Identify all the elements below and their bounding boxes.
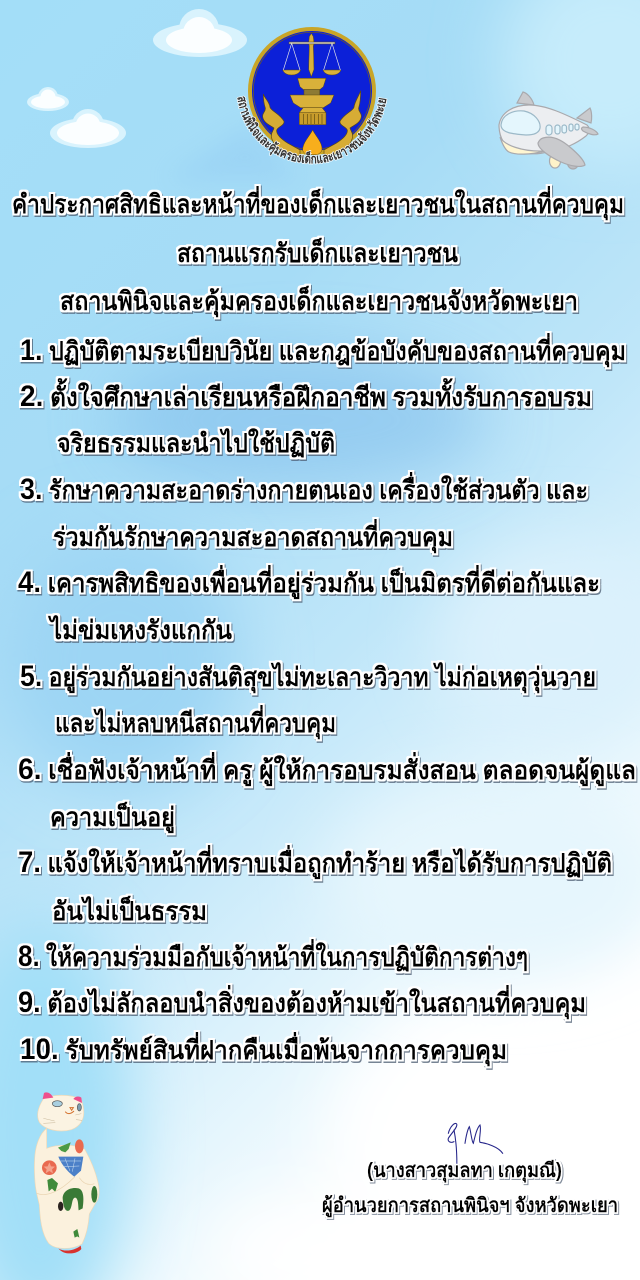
duty 6 xyxy=(18,751,636,834)
duty 3: 3. รักษาความสะอาดร่างกายตนเอง เครื่องใช้ส่วนตัว และ xyxy=(20,471,588,506)
duty 10: 10. รับทรัพย์สินที่ฝากคืนเมื่อพ้นจากการควบคุม xyxy=(20,1031,507,1067)
duty 7: อันไม่เป็นธรรม xyxy=(52,895,207,926)
text block: numbered duties xyxy=(18,332,636,1067)
duty 2: 2. ตั้งใจศึกษาเล่าเรียนหรือฝึกอาชีพ รวมทั้งรับการอบรม xyxy=(20,377,592,413)
duty 5 xyxy=(20,660,596,740)
signatory title: ผู้อำนวยการสถานพินิจฯ จังหวัดพะเยา xyxy=(322,1194,618,1219)
cloud: left xyxy=(50,109,126,148)
duty 7 xyxy=(18,844,612,926)
signature xyxy=(448,1123,503,1175)
duty 3 xyxy=(20,471,588,554)
icon: organisation emblem xyxy=(236,27,388,164)
duty 8: 8. ให้ความร่วมมือกับเจ้าหน้าที่ในการปฏิบัติการต่างๆ xyxy=(18,938,528,973)
duty 9: 9. ต้องไม่ลักลอบนำสิ่งของต้องห้ามเข้าในสถานที่ควบคุม xyxy=(18,984,586,1020)
duty 5: และไม่หลบหนีสถานที่ควบคุม xyxy=(55,704,336,740)
cloud: small left xyxy=(27,87,69,111)
icon: airplane xyxy=(499,92,598,169)
duty 4: 4. เคารพสิทธิของเพื่อนที่อยู่ร่วมกัน เป็นมิตรที่ดีต่อกันและ xyxy=(18,564,600,600)
duty 4 xyxy=(18,564,600,645)
title: สถานพินิจและคุ้มครองเด็กและเยาวชนจังหวัดพะเยา xyxy=(60,285,578,318)
duty 6: ความเป็นอยู่ xyxy=(50,801,175,834)
icon: lucky cat figure xyxy=(34,1092,99,1253)
duty 2: จริยธรรมและนำไปใช้ปฏิบัติ xyxy=(57,427,335,458)
signatory name: (นางสาวสุมลทา เกตุมณี) xyxy=(367,1159,562,1183)
naga right xyxy=(324,91,361,156)
scales of justice xyxy=(283,33,341,155)
duty 3: ร่วมกันรักษาความสะอาดสถานที่ควบคุม xyxy=(53,518,453,554)
duty 2 xyxy=(20,377,592,458)
title: สถานแรกรับเด็กและเยาวชน xyxy=(177,237,458,268)
naga left xyxy=(263,94,300,156)
duty 4: ไม่ข่มเหงรังแกกัน xyxy=(47,614,232,645)
cloud: top center xyxy=(153,9,247,57)
title xyxy=(12,185,624,318)
